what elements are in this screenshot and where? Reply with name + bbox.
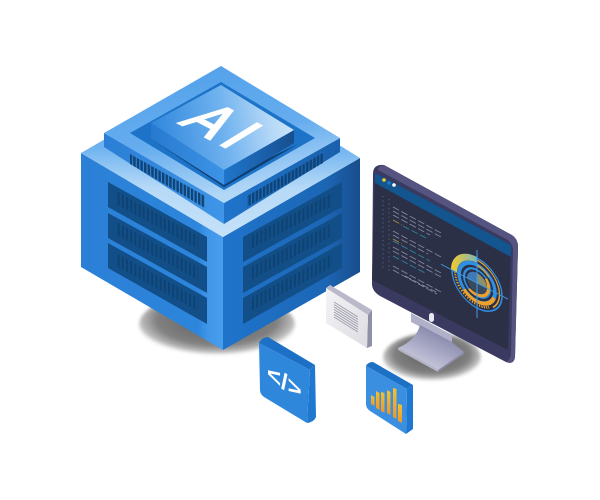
top slab right side <box>224 130 294 185</box>
right vents <box>247 153 323 207</box>
server cube <box>81 66 360 350</box>
lower tier top band <box>81 72 360 237</box>
top slab left side <box>151 123 224 185</box>
recess around top slab <box>130 82 315 190</box>
monitor body <box>372 165 518 363</box>
right face <box>223 158 360 350</box>
left face <box>81 153 223 350</box>
tile side edge <box>307 365 316 423</box>
line numbers <box>383 196 389 272</box>
left rack panels <box>108 182 207 324</box>
tile side edge <box>406 385 413 434</box>
middle tier left side <box>104 133 224 224</box>
card face <box>326 288 368 348</box>
monitor stand neck <box>411 313 452 343</box>
window dots <box>382 178 396 187</box>
tile face <box>259 343 310 423</box>
AI label: AI <box>166 95 283 160</box>
screen title bar <box>375 173 511 257</box>
monitor screen <box>372 173 511 350</box>
middle tier top <box>104 66 340 203</box>
radial chart <box>441 231 508 334</box>
left vents <box>130 154 205 208</box>
card top edge <box>326 285 372 315</box>
middle tier right side <box>224 138 340 224</box>
orange bars <box>371 388 402 423</box>
monitor right edge <box>378 165 518 363</box>
monitor stand base <box>398 325 464 372</box>
card side edge <box>367 310 372 348</box>
document card <box>326 285 372 348</box>
tile top edge <box>259 337 315 370</box>
tile top edge <box>366 362 413 389</box>
shadow: under server <box>139 292 295 358</box>
monitor <box>372 165 518 372</box>
monitor logo <box>429 313 434 322</box>
top slab surface <box>151 85 294 170</box>
right rack panels <box>243 182 342 324</box>
tile face <box>366 366 407 434</box>
code symbol: </> <box>267 357 302 406</box>
code lines <box>393 207 441 294</box>
shadow: under monitor <box>383 333 481 383</box>
code tile <box>259 337 316 423</box>
chart tile <box>366 362 413 434</box>
card text lines <box>334 302 358 332</box>
